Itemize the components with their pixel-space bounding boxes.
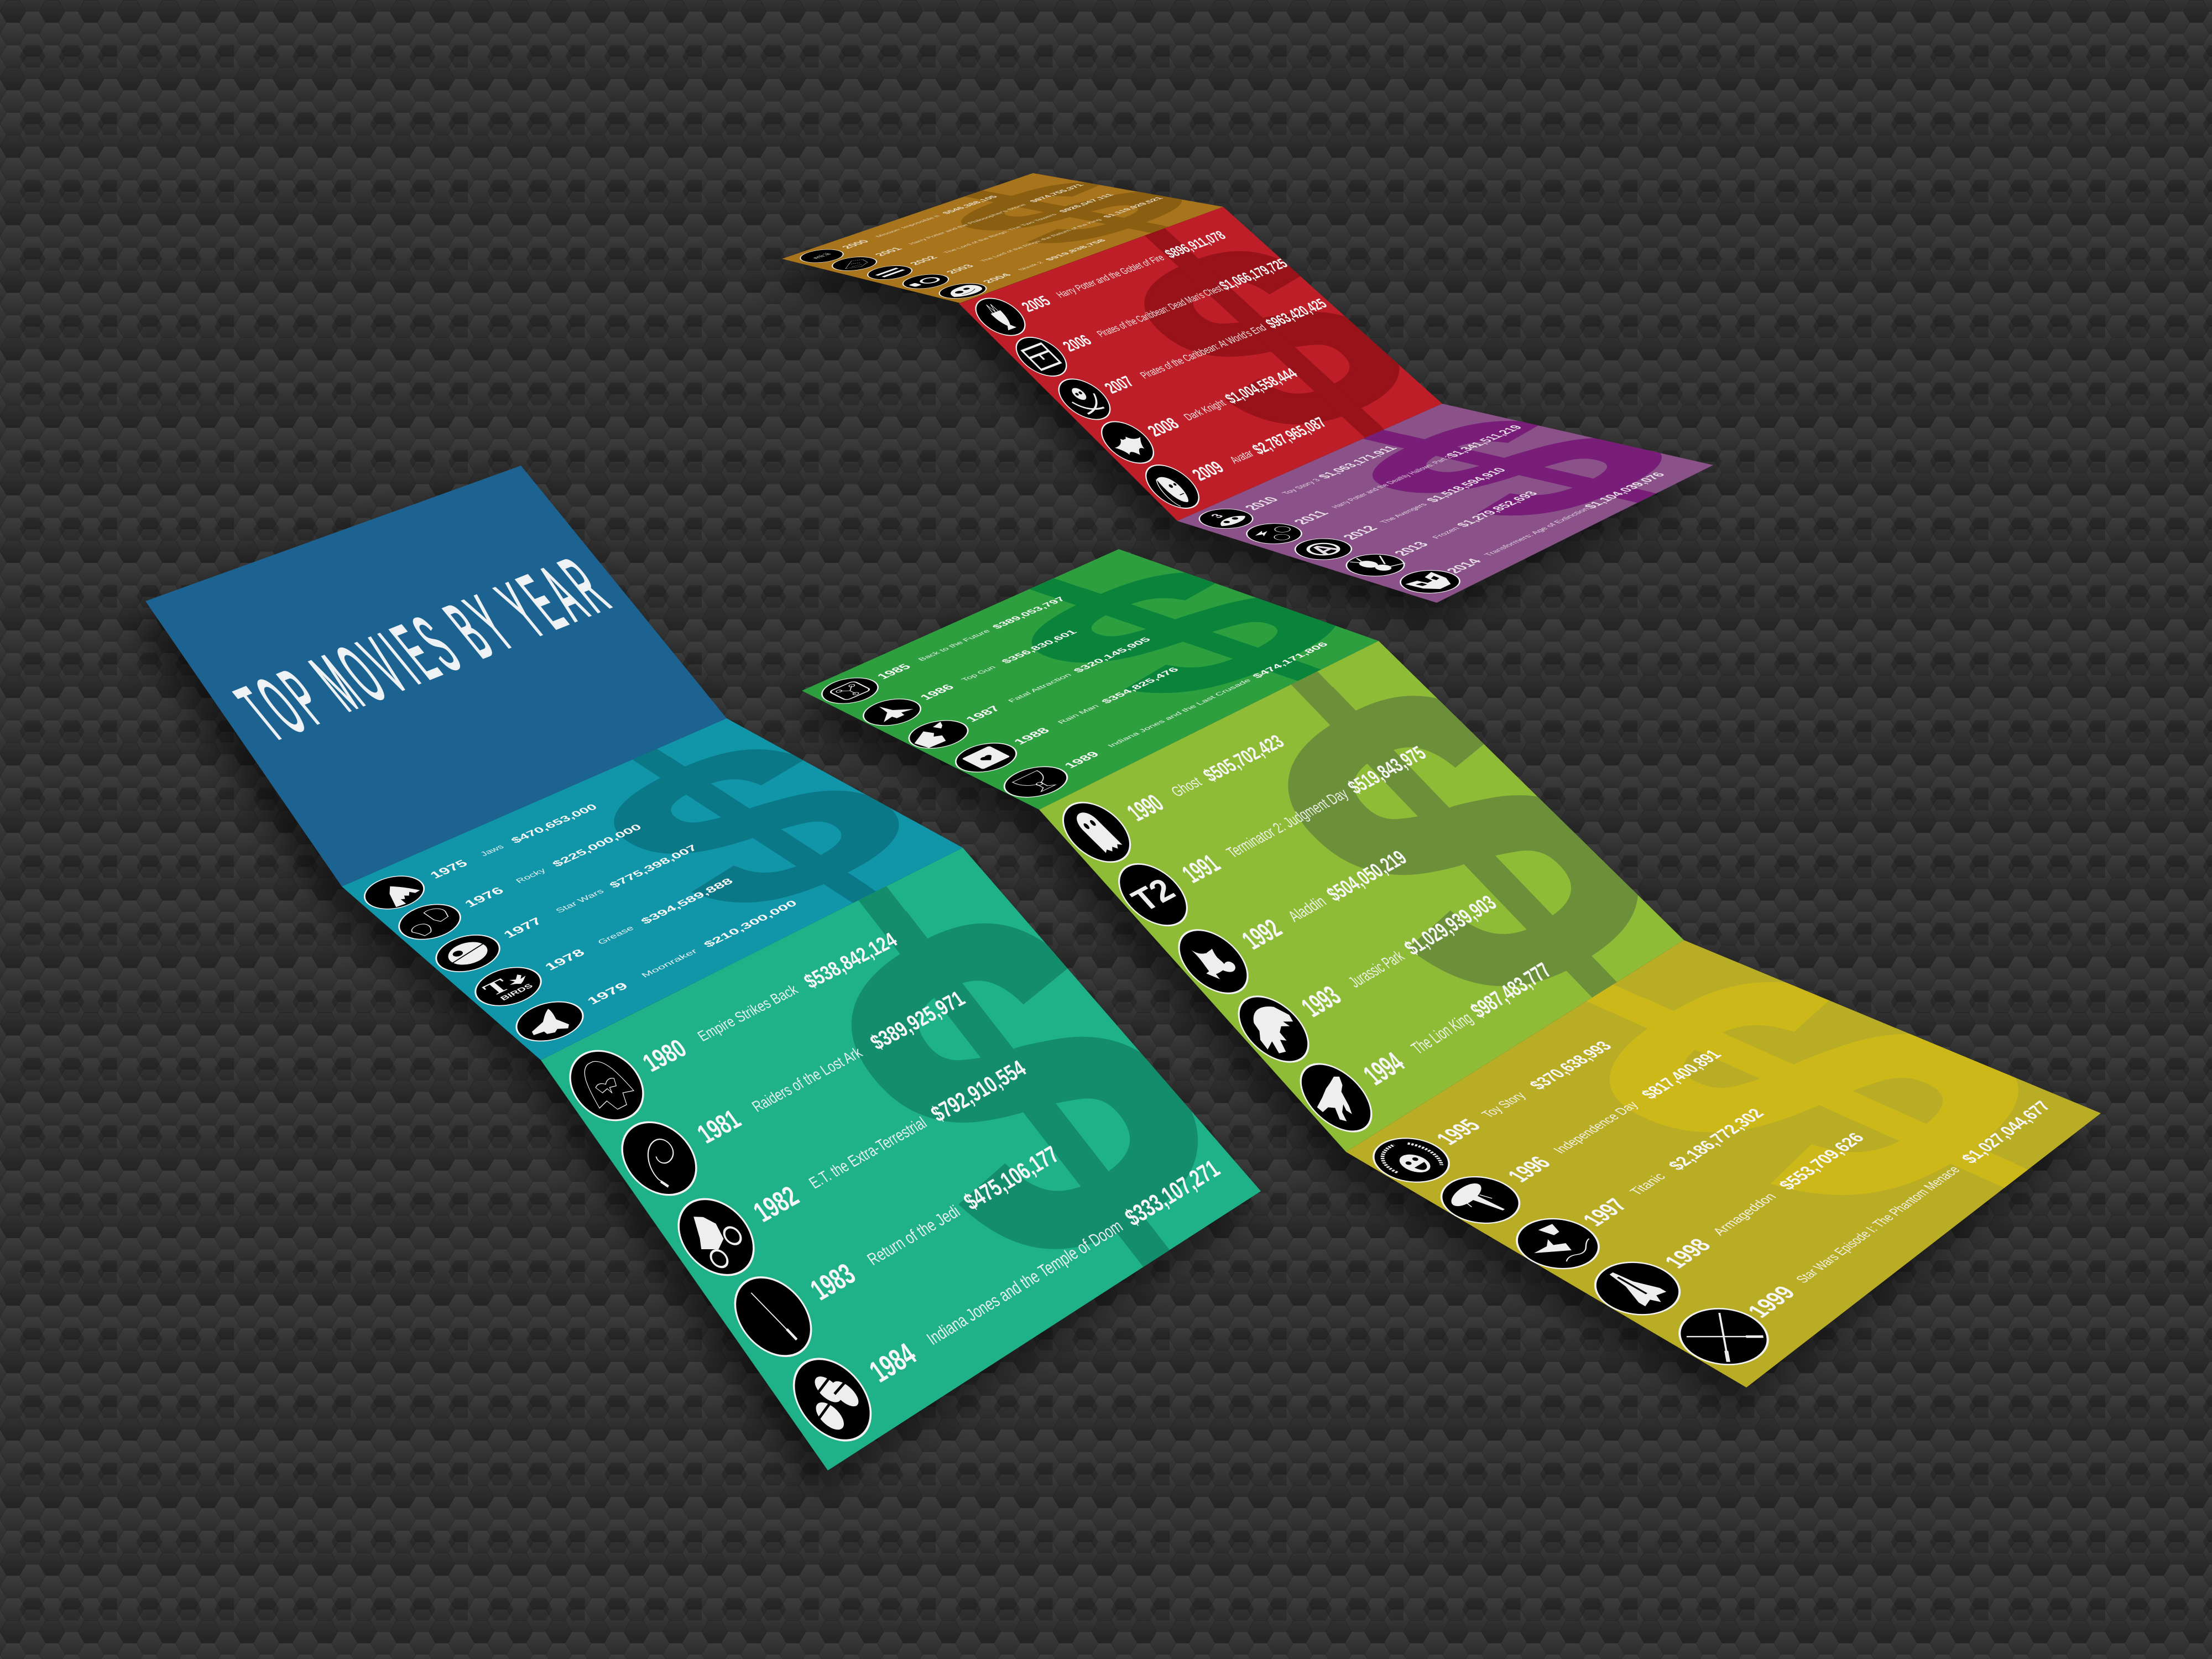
year: 2005 [1018, 293, 1055, 315]
year: 1996 [1502, 1152, 1557, 1186]
value: $389,925,971 [865, 986, 969, 1055]
value: $775,398,007 [607, 843, 700, 890]
value: $2,787,965,087 [1248, 414, 1331, 458]
year: 1983 [804, 1258, 862, 1307]
year: 1979 [584, 980, 631, 1006]
value: $1,004,558,444 [1222, 366, 1302, 406]
dollar sign: red panel: $ [1056, 182, 1484, 493]
value: $356,830,601 [999, 629, 1079, 665]
row: 1979 [504, 888, 812, 1049]
title: Star Wars [554, 888, 606, 914]
title: TOP MOVIES BY YEAR [220, 540, 630, 757]
row: 1986 [852, 623, 1092, 731]
year: 2000 [839, 239, 872, 249]
title: Toy Story 3 [1280, 478, 1323, 495]
row: 2003 [894, 194, 1176, 291]
value: $896,911,078 [1161, 228, 1229, 261]
icon: bat [1091, 416, 1164, 469]
value: $1,279,852,693 [1453, 490, 1541, 528]
icon: chest [1006, 332, 1077, 382]
title: Armageddon [1709, 1191, 1780, 1238]
icon: t-birds: BIRDS [499, 983, 535, 1002]
icon: death star [425, 927, 511, 979]
value: $987,483,777 [1465, 958, 1557, 1023]
value: $963,420,425 [1262, 296, 1331, 331]
title: Indiana Jones and the Last Crusade [1107, 678, 1253, 748]
icon: navi face [1135, 459, 1209, 514]
row: 1993 [1225, 870, 1521, 1073]
value: $538,842,124 [800, 928, 902, 993]
panel: 1990-1994 lime [1000, 411, 1903, 1251]
year: 2003 [944, 264, 977, 274]
value: $1,119,929,521 [1101, 196, 1166, 218]
icon: footprints [778, 1346, 886, 1453]
year: 2010 [1240, 495, 1282, 512]
icon: shark [354, 869, 435, 916]
title: Moonraker [639, 947, 699, 979]
row: 1998 [1578, 1116, 1892, 1326]
year: 2006 [1058, 331, 1095, 354]
row: 1999 [1662, 1083, 2080, 1376]
title: Harry Potter and the Goblet of Fire [1053, 253, 1167, 300]
icon: boxing gloves [388, 897, 471, 947]
dollar sign: green panel: $ [927, 533, 1437, 730]
value: $1,027,044,677 [1957, 1098, 2055, 1166]
row: 1983 [719, 1117, 1082, 1369]
icon: whip [607, 1110, 711, 1207]
dollar sign: gold panel [961, 182, 1182, 243]
title: Mission: Impossible II [874, 215, 942, 238]
row: 1981 [607, 963, 986, 1207]
row: 1990 [1049, 712, 1306, 871]
title: Jaws [478, 843, 506, 858]
row: 2011 [1235, 420, 1540, 548]
icon: autobot [1389, 566, 1472, 598]
year: 1977 [500, 915, 545, 940]
row: 1977 [425, 833, 711, 979]
row: 2014 [1389, 466, 1684, 598]
dollar sign: teal panel [409, 619, 1087, 1024]
title: Pirates of the Caribbean: At World's End [1138, 322, 1269, 380]
title: Back to the Future [917, 629, 992, 662]
value: $370,638,993 [1525, 1038, 1616, 1093]
icon: ring and crown [894, 272, 958, 291]
icon: avengers A: A [1301, 541, 1346, 557]
title: Top Gun [960, 665, 998, 682]
icon: genie lamp [1165, 920, 1261, 1003]
title: E.T. the Extra-Terrestrial [805, 1113, 930, 1192]
row: 1975 [354, 794, 610, 916]
year: 2013 [1390, 540, 1432, 557]
title: The Lion King [1407, 1008, 1477, 1058]
row: 2000 [791, 192, 1010, 265]
icon: two towers [859, 263, 921, 282]
icon: t-rex skeleton [1225, 986, 1323, 1073]
year: 1994 [1357, 1046, 1411, 1091]
sheet: cover and 1975 to 1984 [145, 466, 1444, 1550]
row: 1995 [1358, 1027, 1636, 1191]
value: $919,838,758 [1044, 239, 1108, 261]
title: Independence Day [1550, 1099, 1642, 1156]
year: 2014 [1442, 557, 1485, 575]
title: The Lord of the Rings: the Return of the King [979, 218, 1103, 262]
dollar sign: red panel [1144, 228, 1399, 438]
sheet: 1985 to 1999 [797, 411, 2212, 1387]
icon: ufo and monument [1426, 1167, 1535, 1233]
icon: glasses and bolt [1235, 519, 1313, 548]
title: Indiana Jones and the Temple of Doom [923, 1216, 1126, 1349]
value: $926,047,111 [1057, 193, 1116, 213]
icon: toy story 3: 3 [1207, 513, 1227, 519]
year: 2004 [980, 273, 1015, 284]
title: Empire Strikes Back [695, 982, 801, 1045]
year: 2009 [1188, 458, 1229, 484]
value: $2,186,772,302 [1663, 1105, 1768, 1173]
year: 1997 [1577, 1195, 1634, 1230]
row: 2004 [930, 236, 1120, 301]
row: 1976 [388, 813, 655, 947]
title: The Lord of the Rings: The Two Towers [942, 213, 1059, 254]
dollar sign: purple panel [1127, 359, 1888, 572]
row: 2010 [1188, 441, 1413, 533]
year: 1998 [1658, 1235, 1717, 1272]
title: Harry Potter and the Deathly Hallows: Part 2 [1329, 455, 1454, 509]
year: 1991 [1176, 849, 1227, 889]
icon: olaf [1334, 550, 1416, 581]
panel: 1980-1984 sea green [541, 601, 1444, 1550]
icon: sinking ship [1500, 1208, 1615, 1279]
row: 1984 [778, 1129, 1244, 1453]
icon: avengers A [1284, 534, 1363, 564]
value: $210,300,000 [701, 898, 800, 949]
dollar sign: gold panel: $ [886, 165, 1253, 259]
row: 2009 [1135, 400, 1344, 514]
year: 2011 [1290, 509, 1333, 526]
icon: space shuttle [1578, 1251, 1697, 1326]
year: 1992 [1236, 914, 1288, 955]
title: Titanic [1626, 1171, 1669, 1198]
icon: playing cards [944, 737, 1028, 778]
value: $519,843,975 [1343, 742, 1431, 799]
icon: mi:ii: mi:ii [811, 253, 833, 260]
value: $1,029,939,903 [1400, 891, 1501, 960]
title: Return of the Jedi [863, 1202, 963, 1269]
title: Rain Man [1056, 704, 1101, 725]
year: 1985 [874, 662, 914, 681]
icon: mi:ii [791, 247, 852, 265]
row: 1992 [1165, 826, 1430, 1003]
value: $389,053,797 [990, 596, 1068, 630]
row: 1997 [1500, 1093, 1791, 1279]
icon: darth vader [555, 1040, 658, 1131]
value: $470,653,000 [508, 802, 599, 845]
row: 2005 [966, 217, 1241, 341]
sheet: 2000 to 2014 [782, 79, 1888, 603]
panel: 2005-2009 red [959, 207, 1442, 521]
row: 2013 [1334, 486, 1556, 581]
title: Pirates of the Caribbean: Dead Man's Chest [1094, 283, 1225, 339]
icon: fighter jet [852, 693, 932, 731]
year: 1993 [1295, 980, 1347, 1022]
title: Harry Potter and the Philosopher's Stone [907, 204, 1028, 245]
year: 1975 [427, 858, 471, 880]
value: $792,910,554 [926, 1055, 1031, 1126]
value: $553,709,626 [1774, 1130, 1869, 1193]
title: Ghost [1167, 774, 1206, 800]
row: 1980 [555, 906, 917, 1131]
row: 2008 [1091, 353, 1314, 469]
icon: t-birds: T [477, 975, 516, 1000]
title: The Avengers [1378, 502, 1429, 524]
year: 2002 [907, 255, 941, 266]
row: 1989 [992, 634, 1344, 804]
title: Toy Story [1478, 1090, 1530, 1120]
row: 1987 [898, 630, 1166, 754]
panel: 1985-1989 green [797, 489, 1553, 810]
panel: 1975-1979 teal [342, 619, 1087, 1060]
icon: toy story 3 [1188, 505, 1264, 533]
title: Raiders of the Lost Ark [748, 1044, 866, 1115]
icon: woody [1358, 1129, 1464, 1191]
icon: t-birds [463, 959, 553, 1014]
value: $320,145,905 [1071, 636, 1154, 674]
dollar sign: yellow panel [1247, 812, 2212, 1352]
year: 1989 [1061, 750, 1102, 770]
row: 1982 [663, 1031, 1048, 1287]
year: 1990 [1121, 789, 1170, 826]
value: $1,518,594,910 [1423, 467, 1509, 503]
row: 1978 [463, 866, 748, 1014]
value: $225,000,000 [550, 822, 644, 869]
icon: falcon [823, 254, 885, 273]
year: 2008 [1144, 415, 1183, 440]
value: $394,589,888 [638, 876, 735, 926]
year: 2012 [1339, 524, 1381, 541]
year: 1988 [1011, 726, 1053, 746]
icon: crossed lightsabers [1662, 1297, 1786, 1376]
panel: title cover blue [145, 466, 727, 886]
value: $333,107,271 [1120, 1155, 1225, 1232]
icon: T2: T2 [1124, 872, 1182, 918]
row: 2001 [823, 181, 1097, 273]
row: 2002 [859, 191, 1126, 282]
dollar sign: lime panel [1000, 411, 1903, 1251]
year: 1986 [917, 683, 957, 701]
row: 2012 [1284, 462, 1524, 564]
title: Grease [596, 924, 636, 946]
dollar sign: teal panel: $ [521, 692, 986, 958]
drop shadows under the folded sheets [133, 194, 2089, 1491]
title: Transformers: Age of Extinction [1481, 507, 1592, 557]
dollar sign: lime panel: $ [1162, 579, 1758, 1100]
icon: lion [1286, 1053, 1386, 1142]
title: Avatar [1227, 447, 1256, 466]
year: 1978 [541, 947, 588, 973]
title: Fatal Attraction [1006, 672, 1073, 703]
row: 1991 [1105, 723, 1448, 935]
year: 1980 [638, 1034, 692, 1077]
value: $546,388,105 [941, 195, 1000, 215]
year: 1984 [863, 1337, 922, 1389]
icon: ghost [1049, 794, 1144, 871]
icon: shuttle [504, 994, 595, 1049]
icon: lightsaber [719, 1265, 827, 1369]
value: $505,702,423 [1198, 731, 1288, 786]
row: 1985 [811, 590, 1079, 709]
panel: 2000-2004 gold [782, 173, 1223, 303]
year: 1995 [1430, 1115, 1487, 1149]
icon: knife slash [898, 715, 979, 754]
title: Frozen [1430, 526, 1462, 540]
value: $817,400,891 [1636, 1047, 1726, 1102]
year: 2007 [1100, 373, 1139, 397]
icon: shrek [930, 281, 996, 301]
row: 1988 [944, 660, 1194, 778]
panel: 1995-1999 yellow [1247, 812, 2212, 1387]
value: $1,066,179,725 [1215, 257, 1291, 293]
value: $504,050,219 [1322, 846, 1412, 906]
dollar sign: sea green panel: $ [732, 792, 1311, 1377]
panel: 2010-2014 purple [1127, 359, 1888, 603]
year: 1999 [1742, 1282, 1802, 1322]
icon: holy grail [992, 760, 1079, 804]
year: 1976 [461, 885, 507, 909]
row: 1996 [1426, 1035, 1746, 1233]
title: Rocky [514, 867, 547, 885]
row: 2007 [1048, 284, 1344, 425]
title: Star Wars Episode I: The Phantom Menace [1793, 1164, 1964, 1285]
title: Jurassic Park [1345, 947, 1408, 991]
row: 1994 [1286, 937, 1575, 1142]
icon: goblet [966, 293, 1035, 341]
value: $475,106,177 [959, 1141, 1064, 1215]
year: 1987 [963, 705, 1004, 723]
title: Aladdin [1285, 893, 1330, 925]
dollar sign: green panel [797, 489, 1553, 770]
icon: et bicycle [663, 1187, 769, 1287]
value: $1,341,511,219 [1443, 424, 1526, 458]
icon: T2 [1105, 854, 1201, 935]
dollar sign: sea green panel [583, 601, 1444, 1550]
row: 2006 [1006, 244, 1304, 382]
title: Dark Knight [1181, 398, 1229, 422]
dollar sign: purple panel: $ [1266, 392, 1763, 543]
dollar sign: yellow panel: $ [1455, 906, 2167, 1269]
year: 1981 [691, 1104, 747, 1149]
icon: skull and swords [1048, 373, 1120, 425]
value: $974,755,371 [1027, 184, 1086, 203]
year: 1982 [747, 1180, 805, 1228]
title: Shrek 2 [1016, 262, 1045, 271]
value: $474,171,806 [1250, 641, 1331, 680]
value: $1,063,171,911 [1314, 445, 1400, 480]
year: 2001 [873, 247, 905, 257]
icon: flux capacitor [811, 672, 889, 709]
title: Terminator 2: Judgment Day [1223, 785, 1352, 861]
value: $354,825,476 [1099, 666, 1181, 705]
value: $1,104,039,076 [1580, 471, 1668, 510]
